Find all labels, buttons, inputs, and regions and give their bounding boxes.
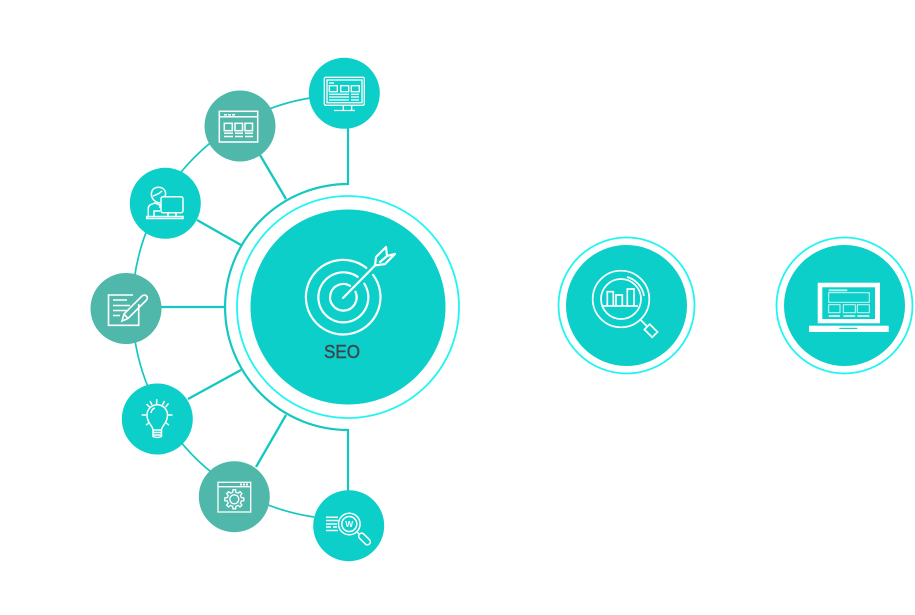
connector network xyxy=(132,98,348,517)
node: person at computer xyxy=(130,168,201,239)
node: monitor xyxy=(309,58,380,129)
icon: laptop xyxy=(809,283,889,332)
icon: person at computer xyxy=(147,187,183,218)
icon: window with gear xyxy=(218,482,251,512)
icon: desktop monitor xyxy=(324,77,364,110)
icon: browser window xyxy=(219,111,258,142)
label: SEO: SEO xyxy=(324,342,360,362)
node: browser layout xyxy=(204,90,276,162)
node: keyword search xyxy=(313,490,384,561)
node: note and pencil xyxy=(90,273,162,344)
node: light bulb xyxy=(122,384,193,454)
icon: light bulb xyxy=(142,399,172,438)
icon: note and pencil xyxy=(108,295,147,325)
icon: target with arrow xyxy=(306,247,395,334)
node: settings window xyxy=(199,461,270,532)
icon: magnifier with bar chart xyxy=(593,271,658,337)
panel: analytics circle xyxy=(558,238,694,374)
icon: keyword magnifier: W xyxy=(345,519,354,529)
central SEO circle xyxy=(237,196,459,418)
panel: laptop circle xyxy=(776,238,912,374)
